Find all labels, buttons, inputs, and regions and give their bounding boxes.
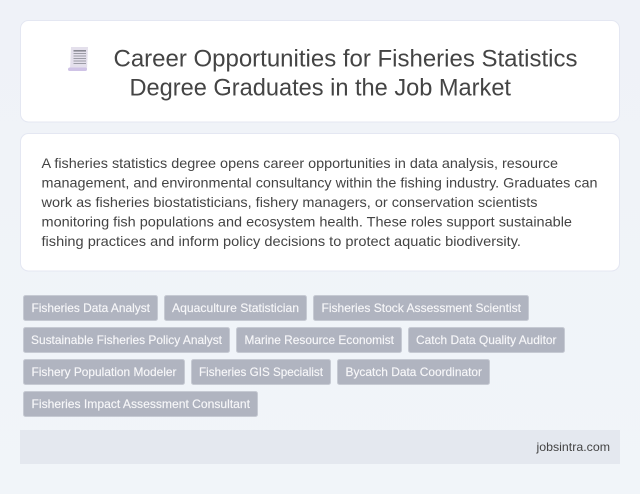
text block: description: A fisheries statistics degree opens career opportunities in data analysis, resource — [42, 155, 558, 171]
tag: Catch Data Quality Auditor — [408, 328, 564, 352]
tag: Fishery Population Modeler: Fishery Population Modeler — [32, 365, 176, 379]
footer source label: jobsintra.com — [535, 440, 610, 454]
text block: description: fishing practices and inform policy decisions to protect aquatic biodiversity. — [42, 233, 521, 249]
text block: description: work as fisheries biostatisticians, fishery managers, or conservation scientists — [40, 194, 538, 210]
text block: description — [40, 155, 597, 249]
title — [114, 46, 578, 102]
tag: Fisheries Data Analyst — [24, 296, 158, 320]
tag: Fisheries Stock Assessment Scientist — [314, 296, 528, 320]
footer — [20, 430, 620, 464]
tag: Fishery Population Modeler — [24, 360, 184, 384]
tag list — [24, 296, 564, 416]
tag: Aquaculture Statistician: Aquaculture Statistician — [172, 301, 299, 315]
tag: Fisheries Impact Assessment Consultant: Fisheries Impact Assessment Consultant — [32, 397, 251, 411]
tag: Sustainable Fisheries Policy Analyst — [24, 328, 230, 352]
tag: Fisheries GIS Specialist: Fisheries GIS Specialist — [199, 365, 324, 379]
text block: description: management, and environmental consultancy within the fishing industry. Graduates can — [42, 174, 598, 190]
tag: Marine Resource Economist — [236, 328, 402, 352]
title: Career Opportunities for Fisheries Statistics — [114, 46, 578, 72]
tag: Marine Resource Economist: Marine Resource Economist — [244, 333, 395, 347]
icon: document scroll — [68, 47, 88, 71]
tag: Sustainable Fisheries Policy Analyst: Sustainable Fisheries Policy Analyst — [31, 333, 223, 347]
text block: description: monitoring fish populations and ecosystem health. These roles support sustainable — [42, 214, 572, 230]
panel: description — [20, 134, 620, 271]
tag: Fisheries Data Analyst: Fisheries Data Analyst — [32, 301, 151, 315]
panel: title card — [20, 20, 620, 122]
tag: Bycatch Data Coordinator — [338, 360, 490, 384]
tag: Aquaculture Statistician — [164, 296, 306, 320]
tag: Bycatch Data Coordinator: Bycatch Data Coordinator — [346, 365, 482, 379]
tag: Fisheries Stock Assessment Scientist: Fisheries Stock Assessment Scientist — [322, 301, 522, 315]
tag: Fisheries Impact Assessment Consultant — [24, 392, 258, 416]
tag: Catch Data Quality Auditor: Catch Data Quality Auditor — [416, 333, 557, 347]
tag: Fisheries GIS Specialist — [192, 360, 330, 384]
title: Degree Graduates in the Job Market — [130, 74, 511, 102]
